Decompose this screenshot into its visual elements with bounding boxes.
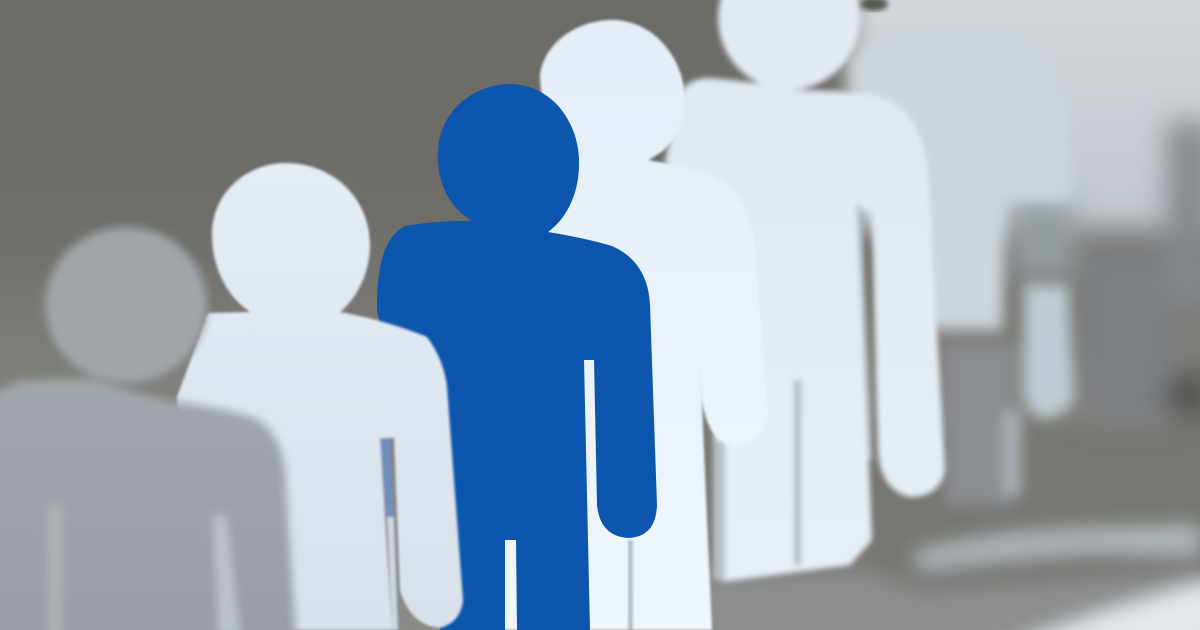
blue head and body <box>377 84 657 630</box>
figure 4: white paper figure <box>500 20 768 630</box>
figure 5: white paper figure <box>665 0 945 582</box>
figure 2: white paper figure <box>177 163 463 630</box>
dark smudge behind the head <box>860 0 888 11</box>
far background figures <box>850 0 1200 420</box>
blue figure <box>377 84 657 630</box>
table surface <box>700 420 1200 630</box>
figure 1: blurred grey foreground figure <box>0 227 296 630</box>
figure 6: far blurred paper figure <box>850 30 1074 505</box>
